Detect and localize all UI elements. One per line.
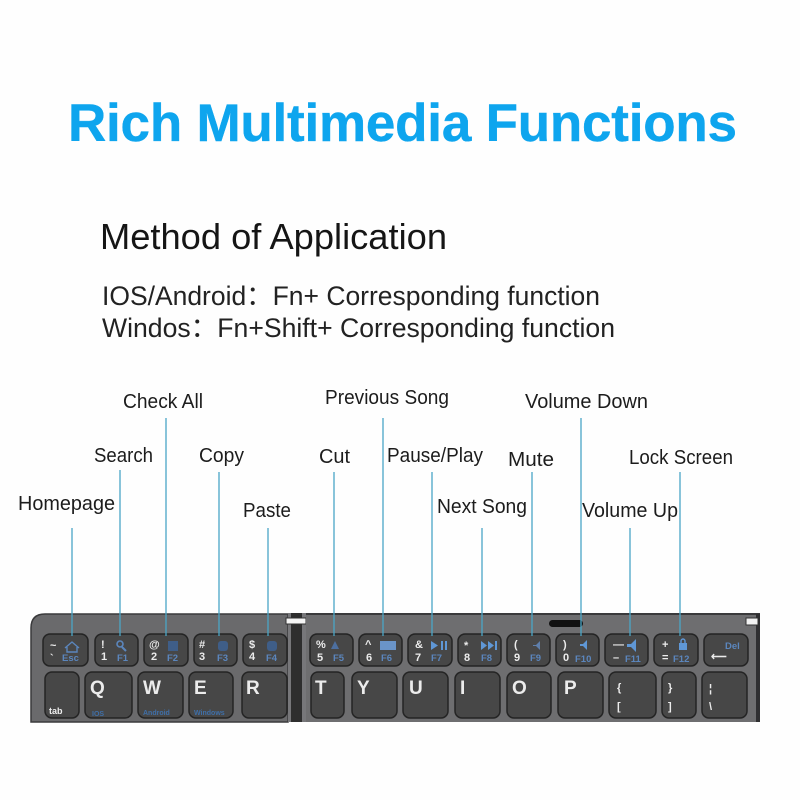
key legends white: P: [564, 678, 577, 699]
key legends blue: F9: [530, 653, 541, 664]
function labels: Volume Up: [582, 500, 678, 522]
key legends blue: Del: [725, 641, 740, 652]
key legends white: ¦: [709, 683, 712, 695]
function labels: Cut: [319, 446, 350, 468]
key legends white: +: [662, 639, 668, 651]
key legends white: `: [50, 653, 54, 665]
right keyboard body: [306, 615, 760, 722]
key legends white: \: [709, 701, 712, 713]
key legends blue: F11: [625, 654, 642, 665]
key legends white: I: [460, 678, 465, 699]
function labels: [18, 387, 733, 522]
key legends blue: F2: [167, 653, 178, 664]
function labels: Homepage: [18, 493, 115, 515]
key legends white: {: [617, 682, 622, 694]
key legends blue: F8: [481, 653, 492, 664]
key legends white: $: [249, 639, 255, 651]
speaker slot: [549, 620, 583, 627]
key legends white: tab: [49, 706, 63, 716]
function labels: Pause/Play: [387, 445, 483, 467]
function labels: Search: [94, 445, 153, 467]
key legends white: T: [315, 678, 327, 699]
key legends blue: F4: [266, 653, 278, 664]
key legends white: 2: [151, 651, 157, 663]
key legends white: ⟵: [711, 651, 727, 663]
function labels: Next Song: [437, 496, 527, 518]
instructions: Windos：Fn+Shift+ Corresponding function: [102, 313, 615, 343]
key legends white: }: [668, 682, 673, 694]
key legends white: *: [464, 640, 469, 652]
key legends white: Y: [357, 678, 370, 699]
key legends blue: F10: [575, 654, 591, 665]
key legends blue: F3: [217, 653, 228, 664]
key legends white: @: [149, 639, 160, 651]
key legends white: ): [563, 639, 567, 651]
key legends white: —: [613, 639, 624, 651]
key legends white: [: [617, 701, 621, 713]
key legends blue: Esc: [62, 653, 79, 664]
key legends white: !: [101, 639, 105, 651]
key legends white: Q: [90, 678, 105, 699]
key legends white: 9: [514, 652, 520, 664]
top row keys left: [43, 634, 287, 666]
key legends white: =: [662, 652, 668, 664]
key legends white: 4: [249, 651, 256, 663]
key legends white: 6: [366, 652, 372, 664]
key legends blue: F6: [381, 653, 392, 664]
key legends white: 3: [199, 651, 205, 663]
key legends blue: F5: [333, 653, 345, 664]
key legends blue: F12: [673, 654, 689, 665]
callout lines: [72, 418, 680, 636]
key legends white: 8: [464, 652, 470, 664]
key legends white: 1: [101, 651, 107, 663]
key legends white: 5: [317, 652, 323, 664]
keyboard: [31, 613, 760, 722]
key legends blue: IOS: [92, 711, 104, 718]
key legends blue: [62, 639, 740, 718]
key legends white: [49, 639, 727, 716]
key legends white: #: [199, 639, 205, 651]
key legends white: U: [409, 678, 423, 699]
key legends white: ]: [668, 701, 672, 713]
instructions: IOS/Android：Fn+ Corresponding function: [102, 281, 600, 311]
function labels: Mute: [508, 449, 554, 471]
key legends white: ^: [365, 639, 372, 651]
key legends white: –: [613, 652, 619, 664]
key legends white: (: [514, 639, 518, 651]
section heading: Method of Application: [100, 216, 447, 257]
function labels: Volume Down: [525, 391, 648, 413]
function labels: Check All: [123, 391, 203, 413]
key legends blue: Android: [143, 710, 170, 717]
key legends blue: F7: [431, 653, 442, 664]
function labels: Paste: [243, 500, 291, 522]
function labels: Lock Screen: [629, 447, 733, 469]
title: Rich Multimedia Functions: [68, 94, 737, 153]
instructions: [102, 281, 615, 343]
key legends white: 0: [563, 652, 569, 664]
letter row keys: [45, 672, 747, 718]
key legends blue: F1: [117, 653, 129, 664]
key legends white: R: [246, 678, 260, 699]
function labels: Copy: [199, 445, 244, 467]
hinge: [286, 613, 307, 722]
key legends white: %: [316, 639, 326, 651]
top row keys right: [310, 634, 748, 666]
key legends blue: Windows: [194, 710, 225, 717]
key legends white: ~: [50, 640, 57, 652]
key legends white: O: [512, 678, 527, 699]
key legends white: 7: [415, 652, 421, 664]
key legends white: E: [194, 678, 207, 699]
function labels: Previous Song: [325, 387, 449, 409]
key legends white: &: [415, 639, 423, 651]
key legends white: W: [143, 678, 161, 699]
left keyboard body: [31, 614, 288, 722]
